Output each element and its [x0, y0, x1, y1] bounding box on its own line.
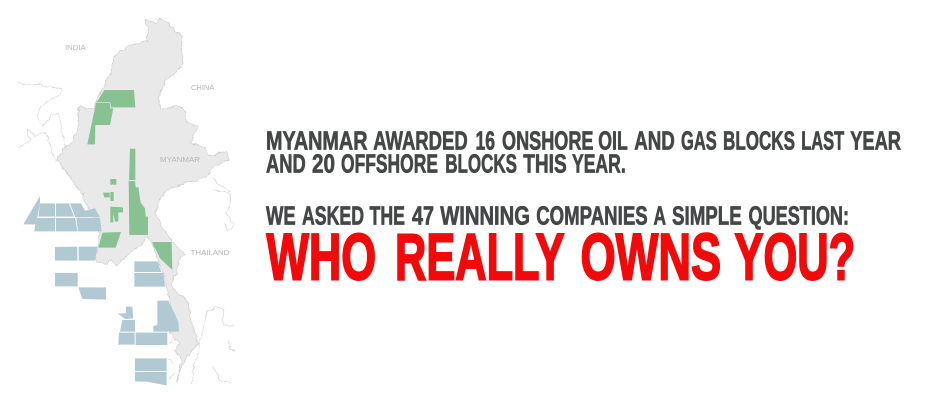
- intro line 1: MYANMAR: [266, 126, 368, 156]
- label: India: INDIA: [65, 45, 86, 52]
- intro line 2: YEAR.: [572, 148, 626, 178]
- intro line 2: OFFSHORE: [341, 148, 438, 178]
- intro line 2: THIS: [523, 148, 567, 178]
- red headline: YOU?: [734, 220, 855, 293]
- intro line 1: 16: [476, 126, 495, 156]
- onshore blocks: [87, 90, 172, 270]
- red headline: OWNS: [580, 220, 721, 293]
- intro line 3: ASKED: [302, 201, 364, 231]
- red headline: [266, 220, 855, 293]
- intro line 3: 47: [412, 201, 434, 231]
- intro line 1: GAS: [681, 126, 717, 156]
- land: Myanmar: [57, 18, 228, 382]
- neighbouring country borders: [18, 83, 235, 385]
- intro line 2: [266, 148, 626, 178]
- intro line 3: COMPANIES: [536, 201, 648, 231]
- intro line 3: A: [654, 201, 666, 231]
- intro line 3: [266, 201, 849, 231]
- intro line 1: ONSHORE: [502, 126, 594, 156]
- intro line 1: [266, 126, 901, 156]
- intro line 3: WE: [266, 201, 296, 231]
- intro line 1: OIL: [598, 126, 628, 156]
- label: China: CHINA: [191, 85, 215, 92]
- intro line 2: AND: [266, 148, 306, 178]
- red headline: REALLY: [395, 220, 564, 293]
- intro line 3: SIMPLE: [672, 201, 742, 231]
- intro line 2: 20: [312, 148, 335, 178]
- intro line 3: WINNING: [440, 201, 530, 231]
- label: Myanmar: MYANMAR: [160, 157, 200, 164]
- intro line 2: BLOCKS: [445, 148, 517, 178]
- offshore blocks: [23, 196, 179, 385]
- label: Thailand: THAILAND: [191, 250, 229, 257]
- intro line 1: AND: [634, 126, 675, 156]
- red headline: WHO: [266, 220, 376, 293]
- intro line 3: THE: [370, 201, 405, 231]
- intro line 1: LAST: [801, 126, 844, 156]
- intro line 1: YEAR: [850, 126, 901, 156]
- intro line 1: BLOCKS: [723, 126, 795, 156]
- intro line 3: QUESTION:: [748, 201, 849, 231]
- intro line 1: AWARDED: [373, 126, 468, 156]
